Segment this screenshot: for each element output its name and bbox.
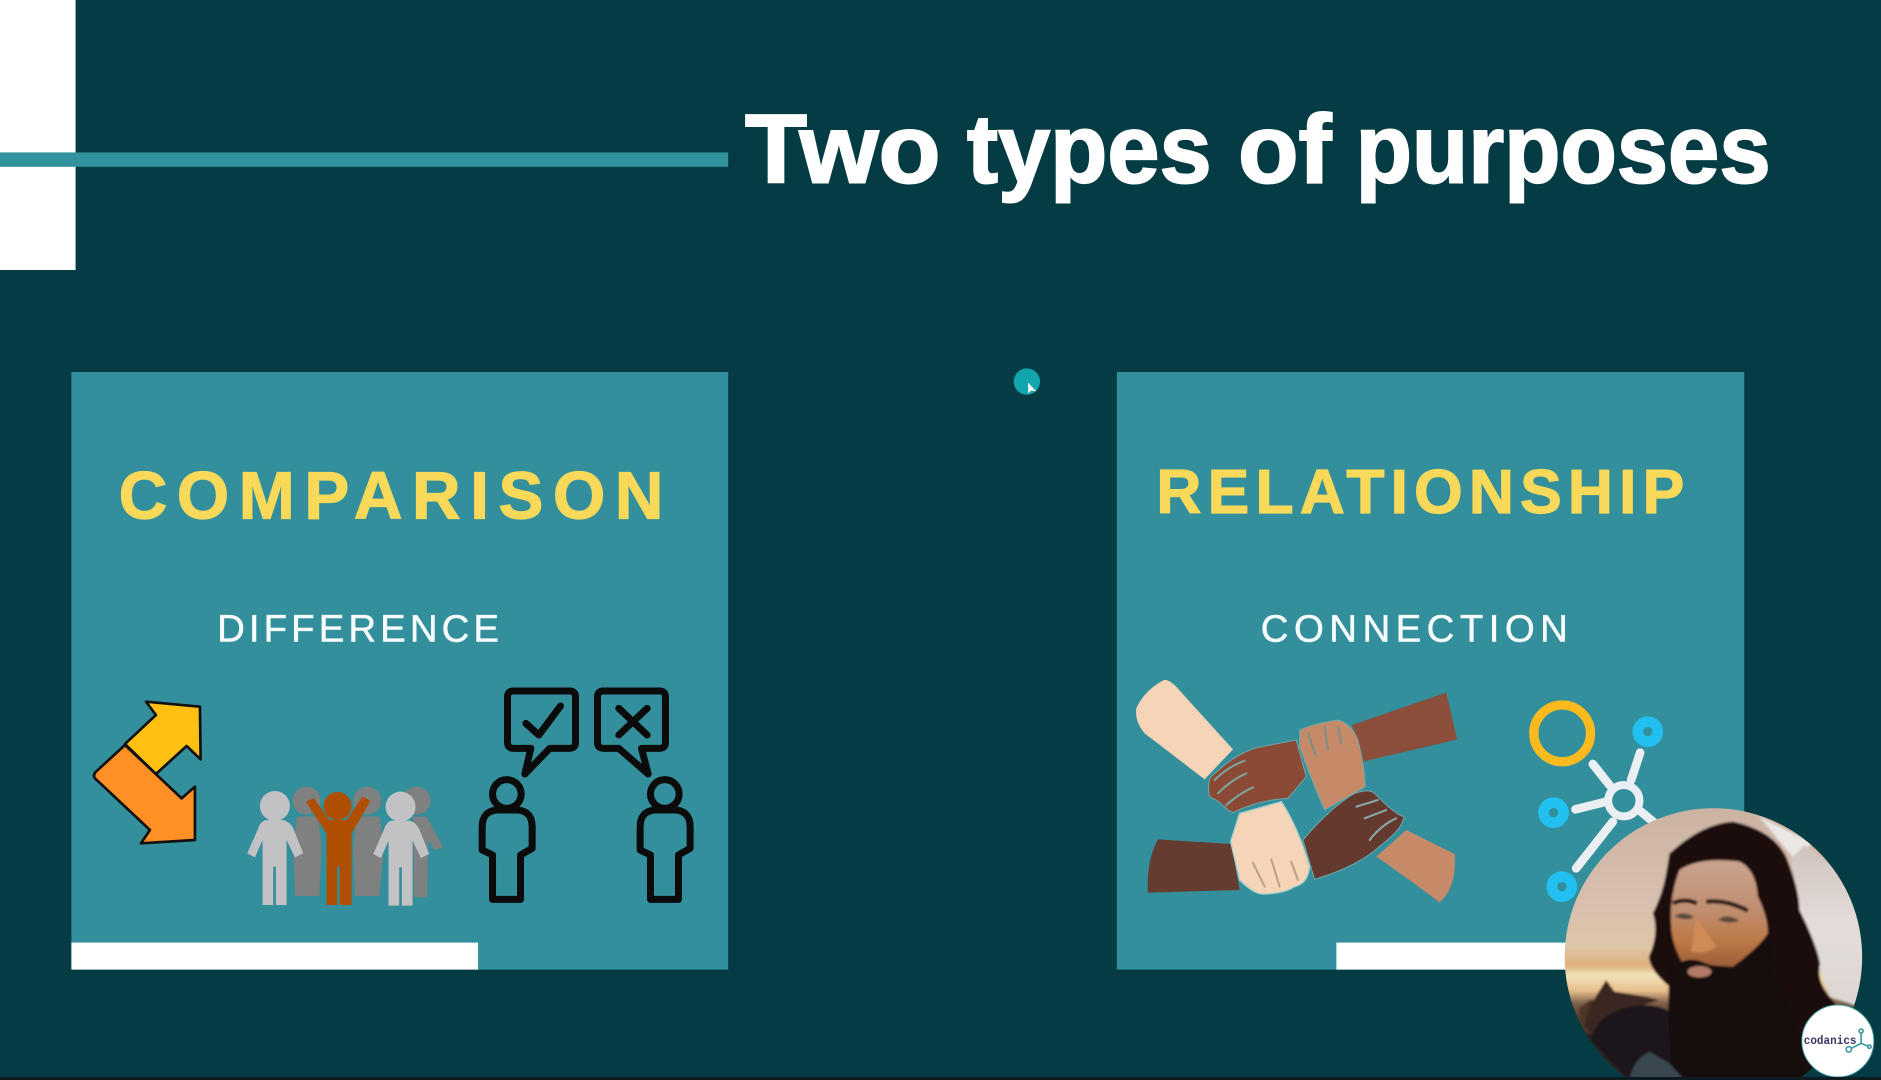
heading: relationship: RELATIONSHIP xyxy=(1156,458,1684,527)
panel: relationship xyxy=(1117,372,1744,970)
icon: network xyxy=(1534,705,1658,897)
pointer dot xyxy=(1014,368,1040,395)
icon: speech bubbles and two people xyxy=(482,691,690,899)
logo badge xyxy=(1802,1005,1874,1077)
white bar xyxy=(71,943,478,970)
bottom edge strip xyxy=(0,1077,1881,1080)
icon: joined hands xyxy=(1136,680,1457,902)
subheading: connection: CONNECTION xyxy=(1261,607,1568,650)
white bar xyxy=(1336,943,1576,970)
subheading: difference: DIFFERENCE xyxy=(217,607,499,650)
icon: crowd of people xyxy=(247,787,443,906)
title: Two xyxy=(745,94,940,203)
icon: double arrows xyxy=(94,702,201,843)
title: purposes xyxy=(1356,94,1771,203)
title rule xyxy=(0,152,728,167)
title xyxy=(745,94,1771,203)
white corner block xyxy=(0,0,76,270)
heading: comparison: COMPARISON xyxy=(119,458,663,533)
panel: comparison xyxy=(71,372,728,970)
presenter webcam circle xyxy=(1564,808,1862,1077)
title: of xyxy=(1238,94,1332,203)
title: types xyxy=(967,94,1212,203)
logo badge: codanics xyxy=(1804,1035,1857,1048)
